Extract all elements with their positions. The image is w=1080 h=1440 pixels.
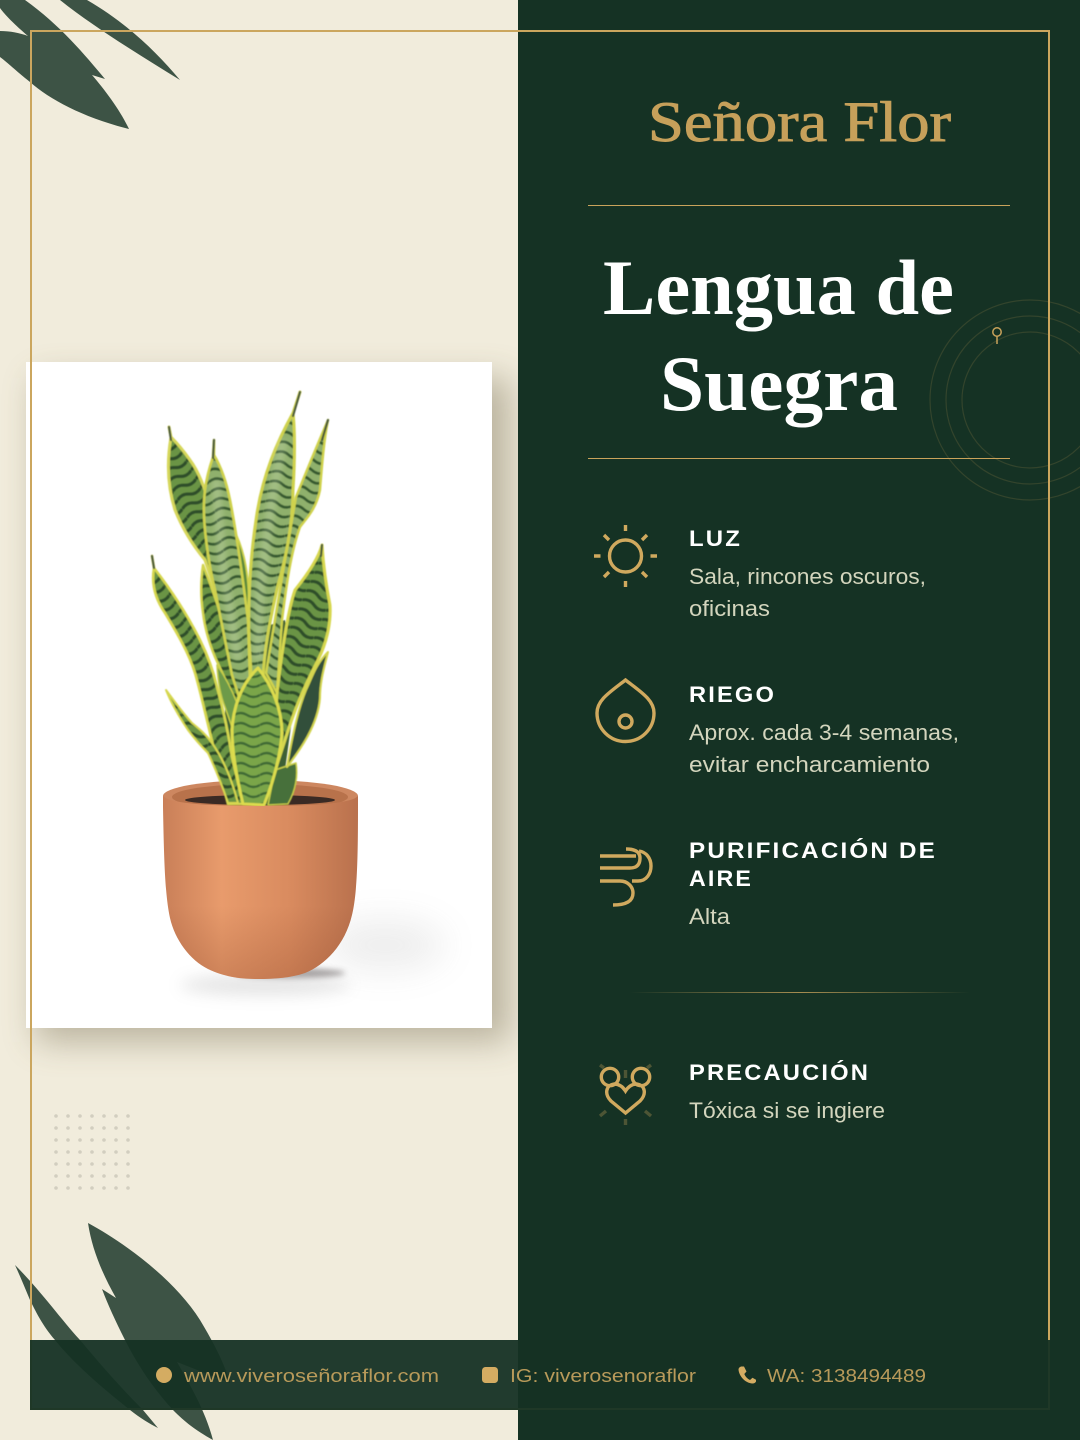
label: purificacion: PURIFICACIÓN DE: [689, 838, 937, 863]
footer whatsapp: WA: 3138494489: [767, 1365, 926, 1386]
divider bottom: [588, 458, 1010, 459]
terracotta pot: [163, 796, 358, 979]
plant title: Lengua de: [603, 244, 954, 331]
snake plant leaves: [152, 392, 330, 805]
label: riego: RIEGO: [689, 682, 776, 707]
photo shadow: [36, 378, 510, 1042]
icon: instagram square: [482, 1367, 498, 1383]
brand name: Señora Flor: [648, 91, 951, 154]
text: luz description: oficinas: [689, 596, 770, 621]
decorative concentric circles: [930, 300, 1080, 500]
icon: wind: [600, 849, 651, 905]
label: luz: LUZ: [689, 526, 742, 551]
label: precaucion: PRECAUCIÓN: [689, 1060, 870, 1085]
right dark green panel: [518, 0, 1080, 1440]
divider top: [588, 205, 1010, 206]
plant photo card: [26, 362, 492, 1028]
floor shadow: [325, 921, 445, 969]
section: riego: [597, 680, 959, 777]
text: riego description: Aprox. cada 3-4 semanas,: [689, 720, 959, 745]
text: riego description: [689, 720, 959, 777]
text: riego description: evitar encharcamiento: [689, 752, 930, 777]
dot grid decoration: [50, 1110, 134, 1194]
plant title: Suegra: [660, 340, 898, 427]
pot back and soil: [163, 780, 358, 812]
text: luz description: [689, 564, 926, 621]
label: purificacion: [689, 838, 937, 891]
section divider: [630, 992, 970, 993]
footer bar: [30, 1340, 1050, 1410]
decorative leaves: top left: [0, 0, 180, 129]
left cream panel: [0, 0, 518, 1440]
plant title: [603, 244, 954, 427]
footer instagram: IG: viverosenoraflor: [510, 1365, 696, 1386]
icon: heart with circles: [600, 1065, 651, 1125]
text: purificacion description: Alta: [689, 904, 731, 929]
filler behind leaves: [225, 620, 296, 805]
decorative leaves: bottom left: [15, 1223, 230, 1440]
text: precaucion description: Tóxica si se ingiere: [689, 1098, 885, 1123]
footer website: www.viveroseñoraflor.com: [183, 1365, 439, 1386]
section: purificacion de aire: [600, 838, 937, 929]
icon: sun: [594, 525, 657, 587]
text: luz description: Sala, rincones oscuros,: [689, 564, 926, 589]
pale leaf centres: [258, 440, 283, 660]
icon: phone: [738, 1366, 756, 1384]
icon: small pin: [993, 328, 1001, 344]
icon: web dot: [156, 1367, 172, 1383]
section: precaucion: [600, 1060, 885, 1125]
section: luz: [594, 525, 926, 621]
dark leaf tips: [152, 392, 328, 568]
label: purificacion: AIRE: [689, 866, 753, 891]
icon: water drop: [597, 680, 654, 742]
